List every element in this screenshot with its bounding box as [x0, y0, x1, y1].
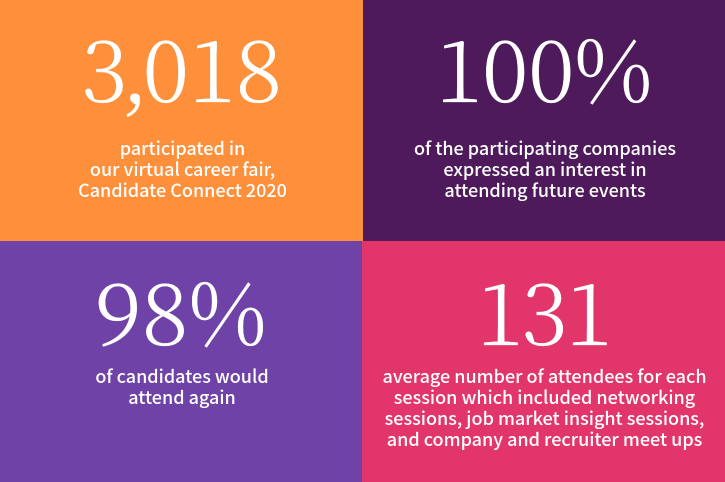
text: companies description: expressed an interest in — [443, 156, 647, 182]
panel: attendees — [362, 241, 725, 482]
big number: 98%: 98% — [95, 246, 267, 370]
big number: 100%: 100% — [436, 3, 652, 127]
text: participants description: participated in — [120, 135, 245, 161]
panel: companies — [363, 0, 725, 241]
big number: 131: 131 — [477, 246, 610, 370]
text: candidates description: attend again — [128, 384, 236, 410]
text: participants description: Candidate Connect 2020 — [78, 177, 287, 203]
text: attendees description: average number of attendees for each — [382, 363, 707, 389]
big number: 3,018: 3,018 — [81, 3, 282, 127]
text: attendees description: and company and recruiter meet ups — [387, 426, 702, 452]
text: attendees description: session which included networking — [394, 384, 695, 410]
text: candidates description — [95, 363, 269, 410]
panel: participants — [0, 0, 363, 241]
text: candidates description: of candidates would — [95, 363, 269, 389]
text: attendees description — [382, 363, 707, 452]
text: participants description — [78, 135, 287, 203]
text: companies description — [414, 135, 676, 203]
text: companies description: of the participating companies — [414, 135, 676, 161]
panel: candidates — [0, 241, 362, 482]
text: attendees description: sessions, job market insight sessions, — [385, 405, 704, 431]
text: companies description: attending future events — [444, 177, 646, 203]
text: participants description: our virtual career fair, — [90, 156, 275, 182]
